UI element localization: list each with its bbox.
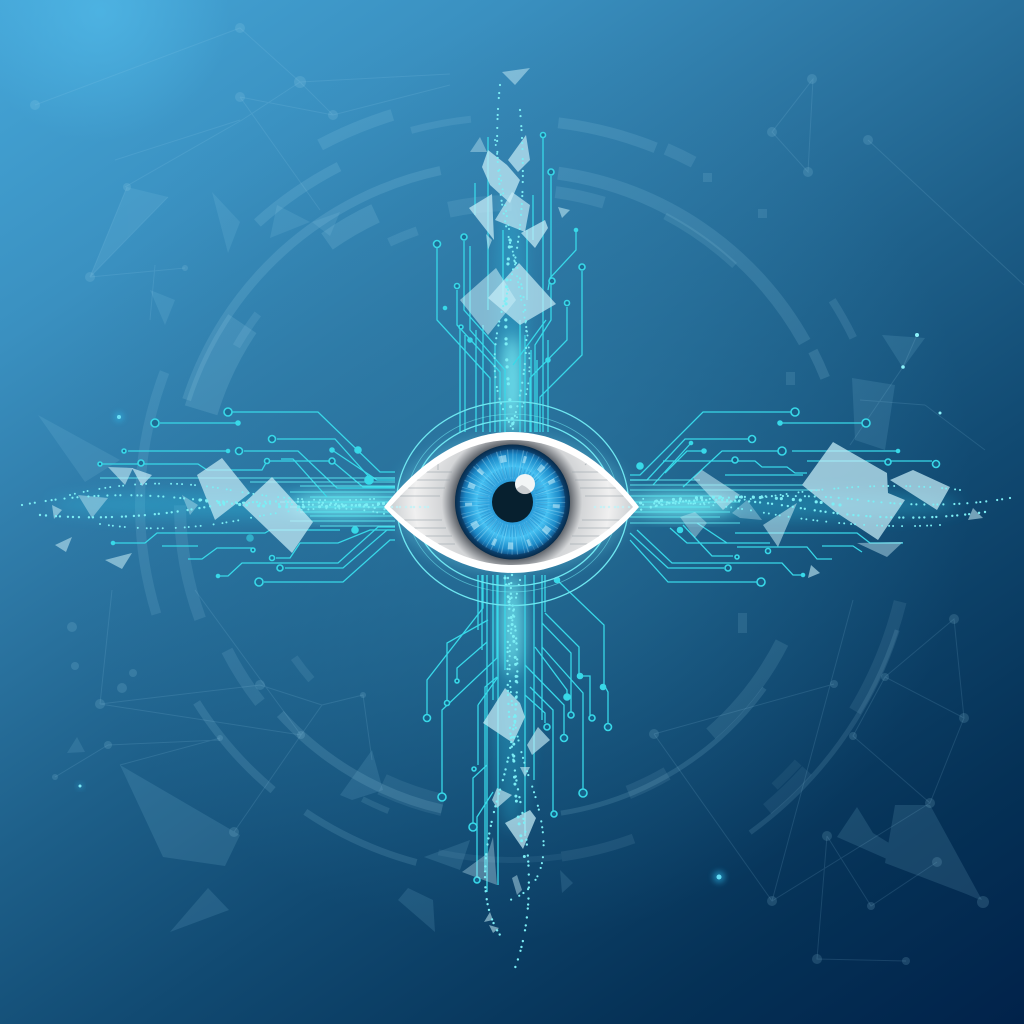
bright core sparkles: [325, 345, 705, 665]
faint background polygons: [38, 187, 982, 932]
bottom arm node circles: [424, 578, 612, 883]
catchlight shadow: [516, 485, 531, 494]
circuit traces: bottom arm: [427, 575, 608, 892]
pupil: [492, 482, 533, 522]
catchlight: [515, 474, 535, 494]
cyan glow dots: [77, 333, 942, 883]
translucent shards: right arm: [680, 442, 983, 578]
right arm horizontal bundle: [630, 480, 820, 523]
right arm nodes: [637, 408, 940, 586]
rings around eye: [396, 402, 628, 606]
circuit traces: top arm: [437, 135, 582, 432]
concentric arc segments: [104, 97, 920, 913]
sclera: [390, 440, 633, 565]
eye: [384, 432, 639, 573]
circuit traces: right arm: [630, 412, 932, 582]
translucent shards: bottom arm: [462, 688, 550, 933]
translucent shards: left arm: [52, 458, 313, 569]
circuit traces: left arm: [100, 412, 395, 582]
left arm nodes: [98, 408, 373, 586]
small square arc fragments: [703, 173, 795, 633]
top arm node circles: [434, 132, 585, 362]
left arm horizontal bundle: [100, 478, 395, 526]
white eyelid rim: [384, 432, 639, 573]
translucent shards: top arm: [460, 68, 570, 335]
iris: [455, 444, 570, 560]
iris fibres: [458, 447, 568, 557]
beam glow: [50, 190, 960, 830]
sclera bright core dots: [392, 506, 632, 508]
sclera circuit detail: [400, 464, 624, 544]
eye glow: [394, 436, 630, 572]
